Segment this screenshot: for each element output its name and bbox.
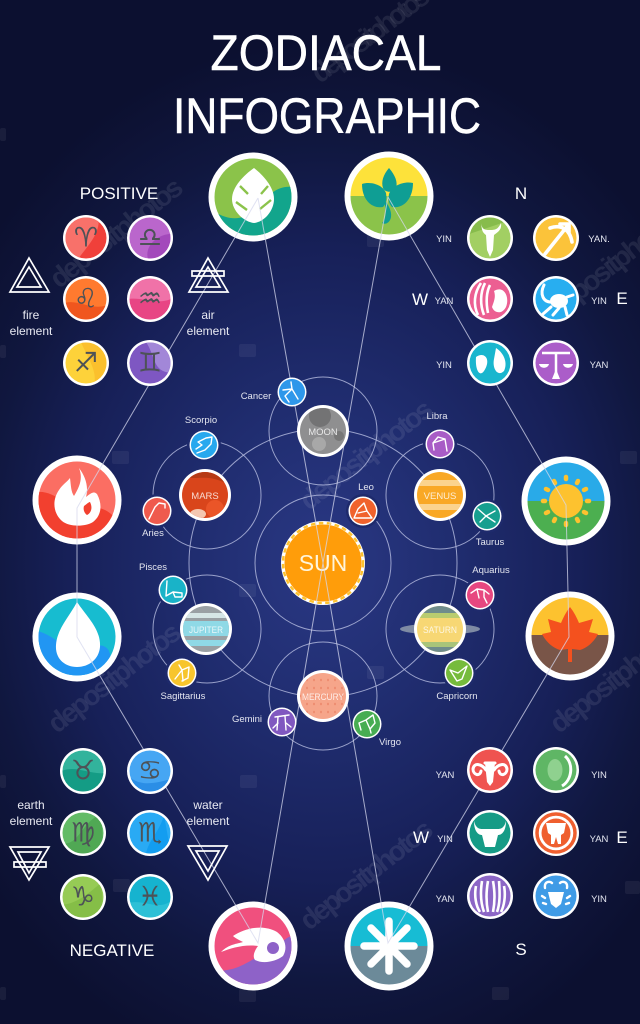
element icon: earth sprout bbox=[344, 152, 434, 240]
compass letters: S bbox=[515, 940, 527, 959]
animal icon: sagittarius bow bbox=[533, 215, 579, 261]
element labels: fire bbox=[23, 308, 40, 322]
constellation: Aquarius bbox=[466, 580, 494, 610]
zodiac symbol: aquarius: ♒︎ bbox=[138, 284, 162, 314]
constellation labels: Aquarius bbox=[472, 565, 510, 576]
element triangle: earth bbox=[10, 847, 49, 880]
constellation: Sagittarius bbox=[168, 658, 196, 688]
element labels: air bbox=[201, 308, 215, 322]
polarity headings bbox=[70, 184, 158, 960]
element icon: snow bbox=[344, 902, 434, 990]
constellation labels: Capricorn bbox=[436, 691, 478, 702]
constellation: Aries bbox=[142, 496, 172, 526]
zodiac symbol: libra bbox=[127, 215, 173, 261]
yin yan labels: YAN bbox=[590, 834, 609, 845]
planet: mercury: MERCURY bbox=[302, 692, 345, 703]
zodiac symbol: virgo bbox=[60, 810, 106, 856]
planet: moon bbox=[297, 405, 349, 457]
element icon: air leaf bbox=[208, 152, 298, 242]
animal icon: leo lion bbox=[533, 810, 579, 856]
yin yan labels: YAN. bbox=[588, 234, 610, 245]
planet: saturn bbox=[400, 603, 480, 655]
zodiac symbol: taurus bbox=[60, 748, 106, 794]
planet: mars bbox=[179, 465, 231, 521]
constellation labels: Virgo bbox=[379, 737, 401, 748]
polarity headings: NEGATIVE bbox=[70, 941, 154, 960]
planet: jupiter: JUPITER bbox=[189, 625, 223, 636]
constellation: Gemini bbox=[268, 708, 296, 736]
constellation: Libra bbox=[426, 430, 454, 458]
zodiac symbol: capricorn bbox=[60, 874, 106, 920]
planet: jupiter bbox=[180, 603, 232, 655]
animal icon: virgo face bbox=[533, 747, 579, 793]
yin yan labels: YIN bbox=[436, 360, 452, 371]
yin yan labels: YAN bbox=[436, 770, 455, 781]
animal icon: aquarius figure bbox=[467, 276, 513, 322]
animal icon: aries ram bbox=[467, 747, 513, 793]
zodiac symbol: aries bbox=[63, 215, 109, 261]
planet: venus: VENUS bbox=[424, 491, 456, 502]
zodiac symbol: cancer bbox=[127, 748, 173, 794]
constellation labels: Libra bbox=[426, 411, 448, 422]
compass letters: W bbox=[412, 290, 428, 309]
watermark text: depositphotos bbox=[294, 393, 439, 516]
compass letters: W bbox=[413, 828, 429, 847]
element labels: element bbox=[10, 324, 53, 338]
animal icon: cancer crab bbox=[533, 873, 579, 919]
constellation labels: Aries bbox=[142, 528, 164, 539]
element labels: earth bbox=[17, 798, 45, 812]
zodiac symbol: scorpio bbox=[127, 810, 173, 856]
element labels: water bbox=[192, 798, 223, 812]
element labels bbox=[10, 308, 230, 828]
constellation labels: Gemini bbox=[232, 714, 262, 725]
yin yan labels bbox=[435, 234, 610, 905]
planet: sun bbox=[281, 521, 365, 605]
yin yan labels: YAN bbox=[435, 296, 454, 307]
animal icon: capricorn goat bbox=[467, 215, 513, 261]
planet: mars: MARS bbox=[191, 491, 219, 502]
zodiac symbol: capricorn: ♑︎ bbox=[71, 882, 95, 912]
zodiac symbol: sagittarius: ♐︎ bbox=[74, 348, 98, 378]
connecting lines bbox=[77, 197, 569, 943]
constellation labels: Sagittarius bbox=[161, 691, 206, 702]
animal icon: scorpion bbox=[533, 276, 579, 322]
yin yan labels: YIN bbox=[436, 234, 452, 245]
yin yan labels: YIN bbox=[591, 296, 607, 307]
constellation labels: Scorpio bbox=[185, 415, 217, 426]
watermark text: depositphotos bbox=[294, 813, 439, 936]
element icon: comet bbox=[208, 902, 298, 990]
zodiac symbol: gemini bbox=[127, 340, 173, 386]
yin yan labels: YAN bbox=[436, 894, 455, 905]
zodiac symbol: cancer: ♋︎ bbox=[138, 756, 162, 786]
element icon: water bbox=[32, 592, 122, 682]
constellation: Virgo bbox=[352, 710, 382, 738]
constellation labels: Taurus bbox=[476, 537, 505, 548]
animal icon: taurus bull bbox=[467, 810, 513, 856]
orbits bbox=[153, 377, 494, 750]
element icon: autumn leaf bbox=[526, 592, 614, 680]
constellation: Capricorn bbox=[444, 658, 474, 688]
zodiac symbol: leo bbox=[63, 276, 109, 322]
animal icon: libra scales bbox=[533, 340, 579, 386]
animal icon: pisces fish bbox=[467, 340, 513, 386]
constellation labels: Pisces bbox=[139, 562, 167, 573]
zodiac symbol: pisces bbox=[127, 874, 173, 920]
element labels: element bbox=[10, 814, 53, 828]
animal icon: gemini twins bbox=[467, 873, 513, 919]
planet: saturn: SATURN bbox=[423, 625, 457, 636]
zodiac symbol: aries: ♈︎ bbox=[74, 222, 98, 254]
constellation: Leo bbox=[348, 496, 378, 526]
yin yan labels: YIN bbox=[591, 894, 607, 905]
zodiac symbol: sagittarius bbox=[63, 340, 109, 386]
yin yan labels: YIN bbox=[591, 770, 607, 781]
element triangle: air bbox=[189, 258, 228, 292]
constellation labels: Cancer bbox=[241, 391, 271, 402]
polarity headings: POSITIVE bbox=[80, 184, 158, 203]
constellation: Cancer bbox=[278, 378, 306, 406]
watermark text: depositphotos bbox=[44, 171, 189, 294]
zodiac symbol: pisces: ♓︎ bbox=[138, 882, 162, 912]
title: ZODIACAL bbox=[210, 25, 442, 81]
title bbox=[173, 25, 481, 144]
constellation: Scorpio bbox=[190, 430, 218, 460]
zodiac symbol: scorpio: ♏︎ bbox=[138, 818, 162, 848]
compass letters: E bbox=[616, 828, 628, 847]
constellation: Pisces bbox=[158, 576, 188, 604]
yin yan labels: YAN bbox=[590, 360, 609, 371]
zodiac symbol: libra: ♎︎ bbox=[138, 222, 162, 254]
zodiac symbol: aquarius bbox=[127, 276, 173, 322]
planet: venus bbox=[414, 469, 466, 521]
yin yan labels: YIN bbox=[437, 834, 453, 845]
title: INFOGRAPHIC bbox=[173, 88, 481, 144]
element icon: fire bbox=[32, 456, 122, 544]
watermark text: depositphotos bbox=[42, 616, 187, 739]
zodiac symbol: gemini: ♊︎ bbox=[138, 348, 162, 378]
element labels: element bbox=[187, 814, 230, 828]
zodiac symbol: virgo: ♍︎ bbox=[71, 818, 95, 848]
zodiac symbol: taurus: ♉︎ bbox=[71, 756, 95, 786]
element triangle: water bbox=[188, 846, 227, 880]
constellation labels: Leo bbox=[358, 482, 374, 493]
constellation labels bbox=[139, 391, 510, 748]
element labels: element bbox=[187, 324, 230, 338]
compass letters: N bbox=[515, 184, 527, 203]
planet: sun: SUN bbox=[299, 550, 347, 576]
planet: moon: MOON bbox=[308, 427, 338, 438]
constellation: Taurus bbox=[472, 502, 502, 530]
element icon: sun bbox=[522, 456, 610, 546]
zodiac symbol: leo: ♌︎ bbox=[74, 284, 98, 314]
planet: mercury bbox=[297, 670, 349, 722]
compass letters bbox=[412, 184, 628, 959]
compass letters: E bbox=[616, 289, 628, 308]
element triangle: fire bbox=[10, 258, 49, 292]
